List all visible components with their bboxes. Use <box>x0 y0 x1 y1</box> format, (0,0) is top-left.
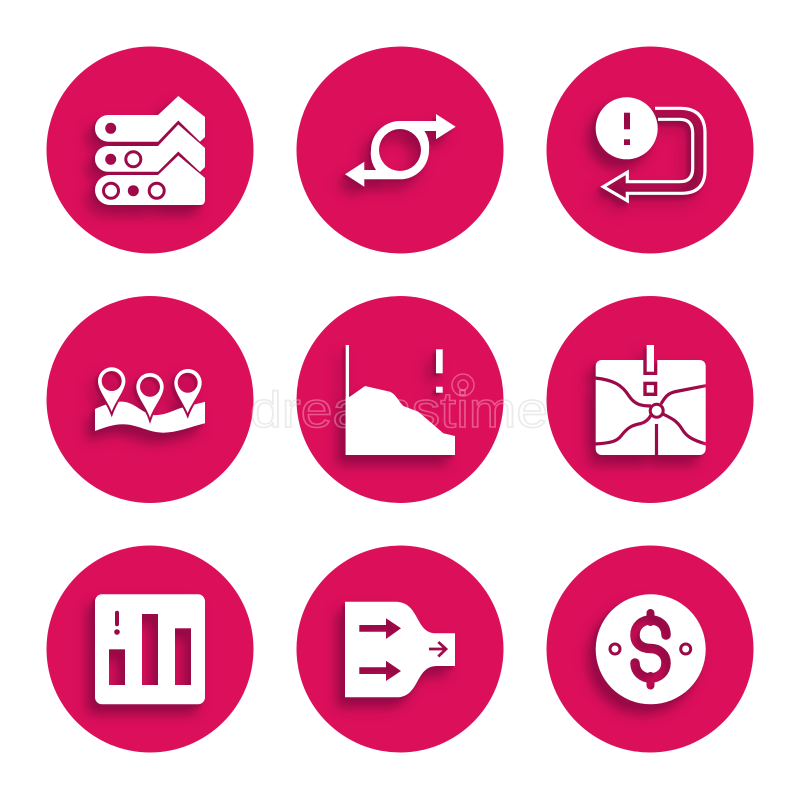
badge circle <box>46 46 254 254</box>
badge circle <box>296 546 504 752</box>
badge circle <box>546 296 754 503</box>
panel: map with location pins <box>46 296 254 503</box>
badge circle <box>46 546 254 752</box>
arrow band shadow <box>598 114 700 207</box>
panel: dollar coin <box>546 546 754 752</box>
panel: road map with alert <box>546 296 754 503</box>
icon: ring with two opposite arrows <box>345 114 456 187</box>
panel: circular exchange arrows <box>296 46 504 254</box>
icon: bottleneck shape with arrows <box>345 602 455 697</box>
panel: stacked server chart <box>46 46 254 254</box>
icon: wavy map and three pins <box>95 367 205 433</box>
icon: area chart with exclamation <box>346 345 455 455</box>
panel: alert with return arrow <box>546 46 754 254</box>
panel: falling area chart <box>296 296 504 503</box>
badge circle <box>546 46 754 254</box>
watermark on background: dreamstime <box>250 382 548 438</box>
panel: bar chart card <box>46 546 254 752</box>
badge circle <box>546 546 754 752</box>
panel: funnel bottleneck <box>296 546 504 752</box>
icon: coin with dollar sign <box>596 594 706 704</box>
badge circle <box>296 296 504 503</box>
badge circle <box>296 46 504 254</box>
icon: road junction map with exclamation <box>596 345 706 455</box>
badge circle <box>46 296 254 503</box>
icon: bars with exclamation <box>95 594 205 704</box>
watermark over badges: dreamstime <box>250 382 548 438</box>
icon: server rows with rising arrows <box>95 96 205 205</box>
icon: exclamation circle and outlined return arrow <box>596 97 705 201</box>
